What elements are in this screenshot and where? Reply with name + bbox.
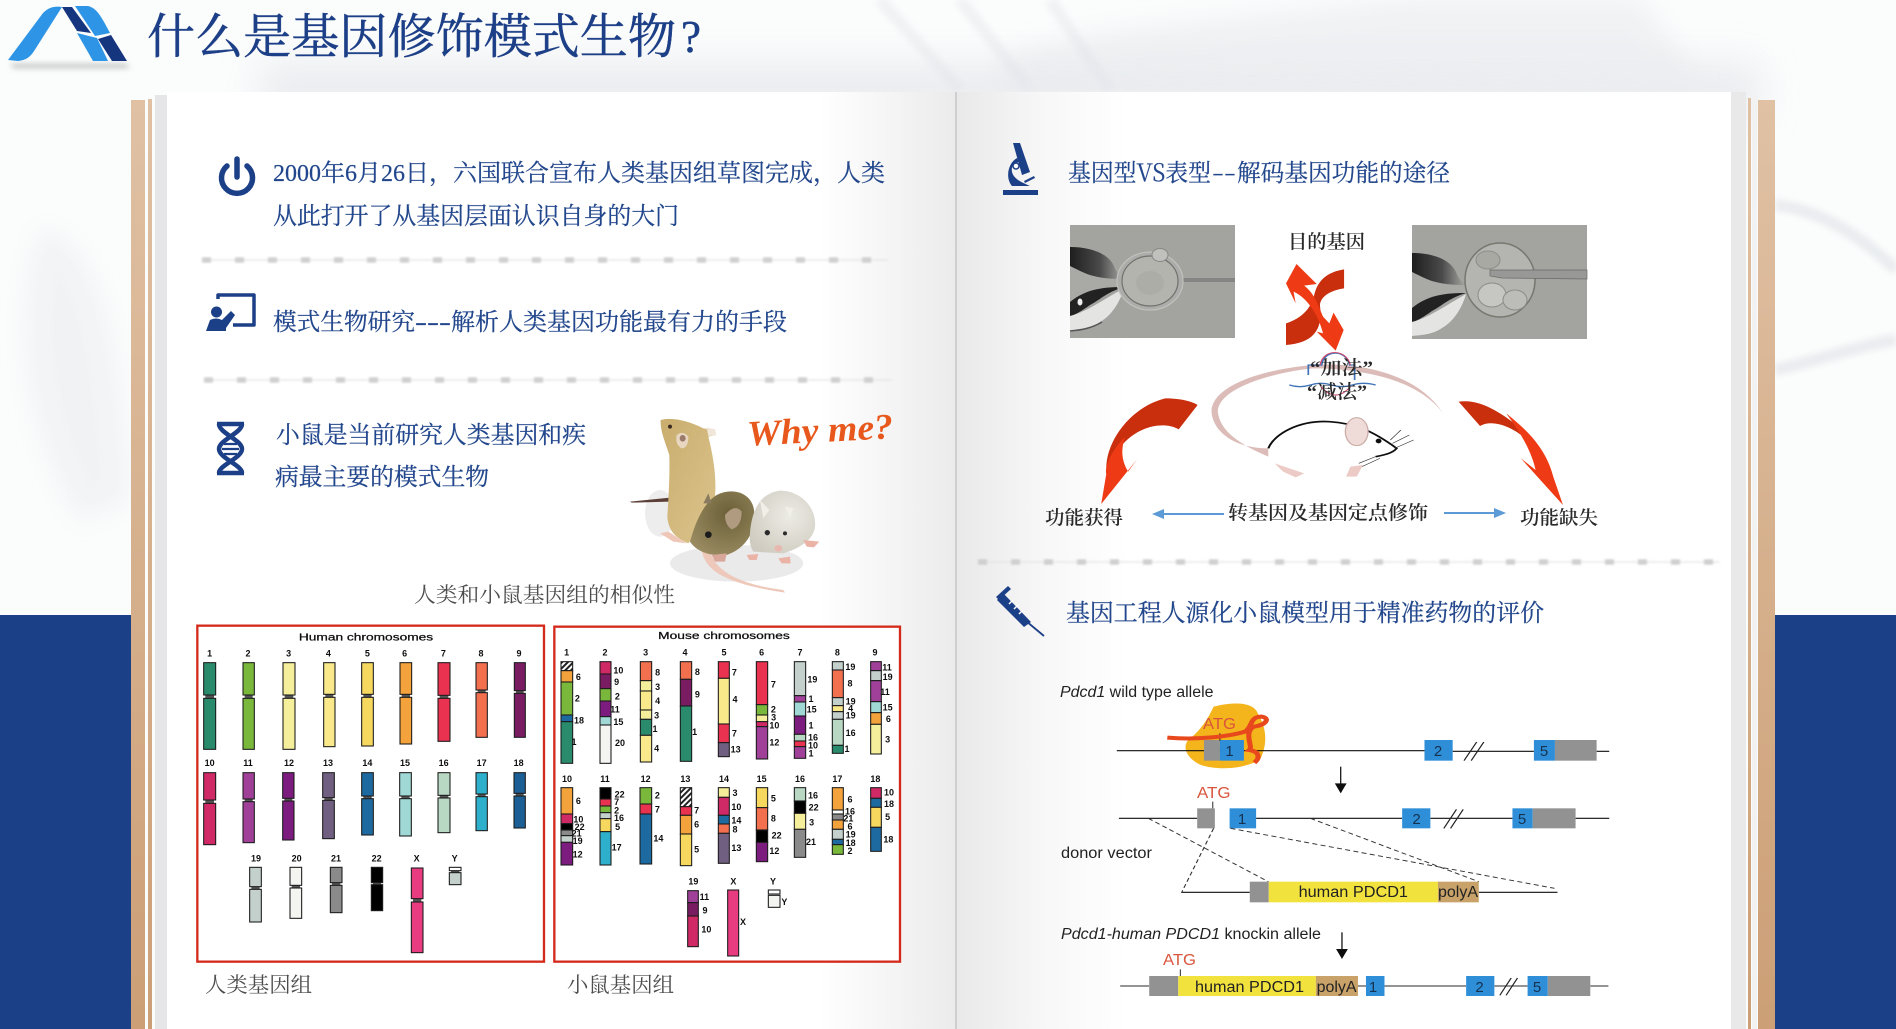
mouse segment labels: 3 bbox=[771, 713, 776, 723]
mouse segment labels: 6 bbox=[576, 796, 581, 806]
gene text labels: polyA bbox=[1438, 884, 1479, 901]
ribosome blob bbox=[1186, 703, 1265, 768]
mouse segment labels: 10 bbox=[808, 740, 818, 750]
mouse segment labels: 7 bbox=[732, 729, 737, 739]
mouse chromosome numbers: 16 bbox=[795, 774, 805, 784]
mouse segment labels: 9 bbox=[702, 905, 707, 915]
mouse segment labels: 12 bbox=[769, 846, 779, 856]
mouse segment labels: 8 bbox=[847, 679, 852, 689]
arrow: blue right bbox=[1444, 508, 1506, 518]
label: loss of function: 功能缺失 bbox=[1520, 507, 1598, 529]
chromosome numbers: 1 bbox=[207, 649, 212, 659]
mouse chromosome numbers bbox=[562, 648, 880, 886]
mouse segment labels: 2 bbox=[615, 691, 620, 701]
chromosome numbers: 2 bbox=[245, 649, 250, 659]
mouse chromosome numbers: 4 bbox=[682, 648, 687, 658]
mouse segment labels: 4 bbox=[848, 703, 853, 713]
text: mouse as model: 小鼠是当前研究人类基因和疾 bbox=[276, 422, 586, 449]
mouse segment labels: 1 bbox=[808, 694, 813, 704]
photo: three mice bbox=[630, 419, 819, 593]
chromosome numbers: 11 bbox=[243, 758, 253, 768]
gene text labels: ATG bbox=[1197, 785, 1230, 802]
photo: embryo left bbox=[1070, 225, 1235, 338]
mouse segment labels: 21 bbox=[572, 829, 582, 839]
text: mouse as model: 病最主要的模式生物 bbox=[275, 464, 489, 491]
mouse segment labels: 13 bbox=[731, 745, 741, 755]
text: why me: Why me? bbox=[746, 406, 894, 454]
mouse chromosome numbers: X bbox=[730, 876, 736, 886]
mouse segment labels: 22 bbox=[772, 830, 782, 840]
gene text labels bbox=[1060, 684, 1548, 996]
mouse segment labels: 19 bbox=[573, 836, 583, 846]
gene text labels: human PDCD1 bbox=[1299, 884, 1408, 901]
heading: genotype vs phenotype: -- bbox=[1212, 153, 1236, 188]
photo: embryo right bbox=[1412, 225, 1587, 339]
mouse segment labels: 3 bbox=[885, 735, 890, 745]
mouse segment labels: 17 bbox=[612, 843, 622, 853]
text: model organism research bbox=[273, 309, 787, 336]
mouse segment labels: 5 bbox=[771, 793, 776, 803]
title: 什么是基因修饰模式生物 bbox=[147, 11, 676, 64]
mouse segment labels: 15 bbox=[613, 717, 623, 727]
mouse segment labels: 1 bbox=[844, 744, 849, 754]
mouse chromosome numbers: 18 bbox=[870, 774, 880, 784]
chromosome numbers: 22 bbox=[372, 854, 382, 864]
mouse segment labels bbox=[571, 662, 894, 934]
chromosome numbers: 16 bbox=[439, 758, 449, 768]
arrow: gain of function red bbox=[1101, 398, 1198, 504]
mouse segment labels: 6 bbox=[694, 820, 699, 830]
chromosome numbers: 20 bbox=[292, 854, 302, 864]
mouse chromosome numbers: 13 bbox=[680, 774, 690, 784]
mouse segment labels: 6 bbox=[847, 821, 852, 831]
mouse segment labels: 15 bbox=[883, 703, 893, 713]
mouse chromosome numbers: 1 bbox=[564, 648, 569, 658]
mouse segment labels: 2 bbox=[847, 846, 852, 856]
gene text labels: 1 bbox=[1225, 743, 1234, 760]
heading: genotype vs phenotype bbox=[1068, 153, 1450, 188]
mouse segment labels: 6 bbox=[847, 795, 852, 805]
mouse segment labels: 8 bbox=[655, 667, 660, 677]
mouse segment labels: 14 bbox=[731, 815, 741, 825]
mouse chromosome numbers: 3 bbox=[643, 648, 648, 658]
mouse segment labels: 2 bbox=[655, 791, 660, 801]
icon: syringe bbox=[996, 586, 1044, 636]
gene text labels: 5 bbox=[1540, 743, 1548, 760]
mouse segment labels: 5 bbox=[885, 812, 890, 822]
mouse segment labels: 16 bbox=[846, 728, 856, 738]
mouse illustration bbox=[1268, 418, 1414, 477]
mouse segment labels: 2 bbox=[771, 705, 776, 715]
caption: human genome: 人类基因组 bbox=[205, 973, 312, 997]
diagram: PDCD1 knock-in schematic bbox=[1060, 684, 1609, 996]
mouse chromosome numbers: 8 bbox=[835, 648, 840, 658]
mouse segment labels: 18 bbox=[884, 799, 894, 809]
mouse segment labels: 6 bbox=[576, 672, 581, 682]
mouse segment labels: 1 bbox=[692, 727, 697, 737]
mouse segment labels: 7 bbox=[771, 679, 776, 689]
heading: human chromosomes: Human chromosomes bbox=[299, 632, 433, 643]
mouse segment labels: 5 bbox=[694, 844, 699, 854]
mouse segment labels: 10 bbox=[884, 788, 894, 798]
gene insert bbox=[1289, 353, 1376, 387]
mouse segment labels: 7 bbox=[732, 667, 737, 677]
chromosome numbers: 19 bbox=[251, 854, 261, 864]
mouse chromosome numbers: 12 bbox=[641, 774, 651, 784]
mouse segment labels: 1 bbox=[571, 737, 576, 747]
gene text labels: donor vector bbox=[1061, 845, 1152, 862]
diagram: gene loop and mouse bbox=[1211, 352, 1443, 477]
mouse segment labels: 10 bbox=[573, 815, 583, 825]
mouse segment labels: 10 bbox=[769, 720, 779, 730]
label: transgenic and targeted modification: 转基因及基因定点修饰 bbox=[1228, 502, 1428, 524]
chromosome numbers: 17 bbox=[477, 758, 487, 768]
mouse segment labels: X bbox=[740, 917, 746, 927]
text: model organism research: 解析人类基因功能最有力的手段 bbox=[451, 309, 787, 336]
mouse segment labels: 14 bbox=[653, 834, 663, 844]
panel: mouse chromosomes bbox=[554, 627, 900, 962]
blue band right bbox=[1775, 615, 1896, 1029]
title: ? bbox=[681, 11, 701, 62]
gene shapes bbox=[1117, 703, 1609, 996]
mouse segment labels: 1 bbox=[652, 724, 657, 734]
gene text labels: human PDCD1 bbox=[1195, 979, 1304, 996]
caption: similarity: 人类和小鼠基因组的相似性 bbox=[414, 583, 675, 607]
gene text labels: 5 bbox=[1518, 811, 1526, 828]
mouse segment labels: 13 bbox=[731, 843, 741, 853]
mouse chromosome numbers: 9 bbox=[872, 648, 877, 658]
text: mouse as model bbox=[275, 422, 586, 491]
mouse segment labels: 2 bbox=[614, 805, 619, 815]
text: model organism research: --- bbox=[415, 310, 451, 336]
label: addition: “加法” bbox=[1310, 357, 1373, 379]
heading: genotype vs phenotype: 基因型VS表型 bbox=[1068, 153, 1211, 188]
chromosome numbers: 21 bbox=[331, 854, 341, 864]
mouse chromosome numbers: 14 bbox=[719, 774, 729, 784]
heading: humanized mouse models: 基因工程人源化小鼠模型用于精准药物的评价 bbox=[1066, 600, 1544, 627]
arrow: blue left bbox=[1152, 509, 1224, 519]
mouse segment labels: 19 bbox=[883, 672, 893, 682]
text block: genome draft: 2000年6月26日，六国联合宣布人类基因组草图完成，人类 bbox=[273, 160, 885, 187]
caption: mouse genome: 小鼠基因组 bbox=[567, 973, 674, 997]
mouse segment labels: 3 bbox=[655, 682, 660, 692]
chromosome numbers: 18 bbox=[514, 758, 524, 768]
mouse segment labels: 8 bbox=[732, 824, 737, 834]
gene text labels: polyA bbox=[1317, 979, 1357, 996]
mouse segment labels: 6 bbox=[886, 714, 891, 724]
mouse segment labels: 8 bbox=[771, 814, 776, 824]
mouse segment labels: 21 bbox=[806, 837, 816, 847]
mouse segment labels: 16 bbox=[808, 790, 818, 800]
mouse segment labels: 10 bbox=[731, 802, 741, 812]
mouse segment labels: Y bbox=[781, 897, 787, 907]
mouse segment labels: 18 bbox=[574, 715, 584, 725]
panel: human chromosomes bbox=[197, 626, 544, 962]
mouse segment labels: 11 bbox=[880, 687, 890, 697]
mouse segment labels: 18 bbox=[883, 834, 893, 844]
arrow: loss of function red bbox=[1459, 401, 1563, 505]
label: target gene: 目的基因 bbox=[1288, 231, 1365, 253]
mouse segment labels: 4 bbox=[655, 696, 660, 706]
icon: DNA bbox=[217, 424, 244, 473]
chromosome numbers: 14 bbox=[362, 758, 372, 768]
mouse chromosome numbers: 5 bbox=[721, 648, 726, 658]
text block: genome draft: 从此打开了从基因层面认识自身的大门 bbox=[273, 203, 679, 230]
heading: genotype vs phenotype: 解码基因功能的途径 bbox=[1237, 153, 1450, 188]
mouse chromosome numbers: 2 bbox=[602, 648, 607, 658]
gene text labels: Pdcd1 wild type allele bbox=[1060, 684, 1214, 701]
mouse segment labels: 19 bbox=[846, 711, 856, 721]
mouse chromosome numbers: 10 bbox=[562, 774, 572, 784]
mouse karyotype segments bbox=[561, 662, 881, 956]
mouse chromosome numbers: 11 bbox=[600, 774, 610, 784]
mouse segment labels: 16 bbox=[845, 806, 855, 816]
chromosome numbers: Y bbox=[452, 854, 458, 864]
mouse chromosome numbers: 19 bbox=[688, 876, 698, 886]
text: model organism research: 模式生物研究 bbox=[273, 309, 415, 336]
icon: power bbox=[221, 159, 252, 193]
chromosome numbers: 10 bbox=[205, 758, 215, 768]
mouse segment labels: 7 bbox=[614, 797, 619, 807]
book bbox=[131, 92, 1775, 1029]
mouse segment labels: 15 bbox=[807, 705, 817, 715]
chromosome numbers: X bbox=[414, 854, 420, 864]
mouse segment labels: 16 bbox=[808, 733, 818, 743]
mouse segment labels: 22 bbox=[575, 822, 585, 832]
mouse segment labels: 18 bbox=[846, 838, 856, 848]
label: gain of function: 功能获得 bbox=[1045, 507, 1123, 529]
gene text labels: 2 bbox=[1434, 743, 1442, 760]
heading: mouse chromosomes: Mouse chromosomes bbox=[658, 631, 790, 642]
arrows: central crossing red bbox=[1286, 264, 1344, 351]
mouse segment labels: 22 bbox=[809, 803, 819, 813]
mouse segment labels: 19 bbox=[846, 830, 856, 840]
gene text labels: 5 bbox=[1533, 979, 1541, 996]
mouse segment labels: 20 bbox=[615, 738, 625, 748]
mouse chromosome numbers: 17 bbox=[832, 774, 842, 784]
mouse segment labels: 10 bbox=[701, 924, 711, 934]
mouse segment labels: 3 bbox=[732, 788, 737, 798]
mouse segment labels: 21 bbox=[843, 814, 853, 824]
chromosome numbers: 15 bbox=[400, 758, 410, 768]
mouse segment labels: 4 bbox=[732, 695, 737, 705]
gene text labels: 1 bbox=[1238, 811, 1246, 828]
mouse segment labels: 11 bbox=[700, 892, 709, 902]
gene text labels: Pdcd1-human PDCD1 knockin allele bbox=[1061, 926, 1321, 943]
mouse segment labels: 19 bbox=[845, 662, 855, 672]
mouse segment labels: 10 bbox=[613, 665, 623, 675]
chromosome numbers: 8 bbox=[478, 649, 483, 659]
gene text labels: ATG bbox=[1163, 952, 1196, 969]
mouse segment labels: 7 bbox=[655, 805, 660, 815]
mouse chromosome numbers: 6 bbox=[759, 648, 764, 658]
mouse segment labels: 7 bbox=[694, 805, 699, 815]
chromosome numbers: 13 bbox=[323, 758, 333, 768]
human karyotype bars bbox=[204, 663, 525, 953]
gene text labels: 2 bbox=[1412, 811, 1421, 828]
chromosome numbers: 4 bbox=[326, 649, 331, 659]
mouse segment labels: 19 bbox=[807, 675, 817, 685]
mouse segment labels: 12 bbox=[769, 737, 779, 747]
mouse segment labels: 9 bbox=[614, 677, 619, 687]
mouse segment labels: 4 bbox=[654, 744, 659, 754]
mouse chromosome numbers: 15 bbox=[757, 774, 767, 784]
mouse segment labels: 22 bbox=[615, 789, 625, 799]
gene text labels: 1 bbox=[1369, 979, 1377, 996]
mouse segment labels: 1 bbox=[808, 749, 813, 759]
icon: microscope bbox=[1003, 143, 1038, 195]
mouse segment labels: 11 bbox=[882, 663, 892, 673]
mouse tail arc bbox=[1211, 364, 1443, 457]
mouse chromosome numbers: 7 bbox=[797, 648, 802, 658]
mouse segment labels: 1 bbox=[808, 720, 813, 730]
mouse segment labels: 9 bbox=[695, 689, 700, 699]
mouse segment labels: 12 bbox=[573, 850, 583, 860]
gene text labels: 2 bbox=[1475, 979, 1484, 996]
mouse segment labels: 3 bbox=[809, 817, 814, 827]
mouse segment labels: 5 bbox=[615, 822, 620, 832]
logo bbox=[8, 6, 130, 68]
mouse segment labels: 8 bbox=[695, 667, 700, 677]
mouse segment labels: 16 bbox=[614, 813, 624, 823]
blue band left bbox=[0, 615, 131, 1029]
mouse segment labels: 19 bbox=[846, 697, 856, 707]
mouse segment labels: 3 bbox=[654, 710, 659, 720]
mouse chromosome numbers: Y bbox=[770, 876, 776, 886]
chromosome numbers: 3 bbox=[286, 649, 291, 659]
label: subtraction: “减法” bbox=[1307, 381, 1367, 403]
chromosome numbers: 6 bbox=[402, 649, 407, 659]
mouse segment labels: 2 bbox=[575, 694, 580, 704]
chromosome numbers: 5 bbox=[365, 649, 370, 659]
chromosome numbers: 9 bbox=[516, 649, 521, 659]
text block: genome draft bbox=[273, 160, 885, 230]
icon: presenter at board bbox=[206, 295, 254, 331]
chromosome numbers: 7 bbox=[441, 649, 446, 659]
chromosome numbers bbox=[205, 649, 524, 864]
mouse segment labels: 11 bbox=[610, 705, 620, 715]
chromosome numbers: 12 bbox=[284, 758, 294, 768]
gene text labels: ATG bbox=[1203, 716, 1236, 733]
